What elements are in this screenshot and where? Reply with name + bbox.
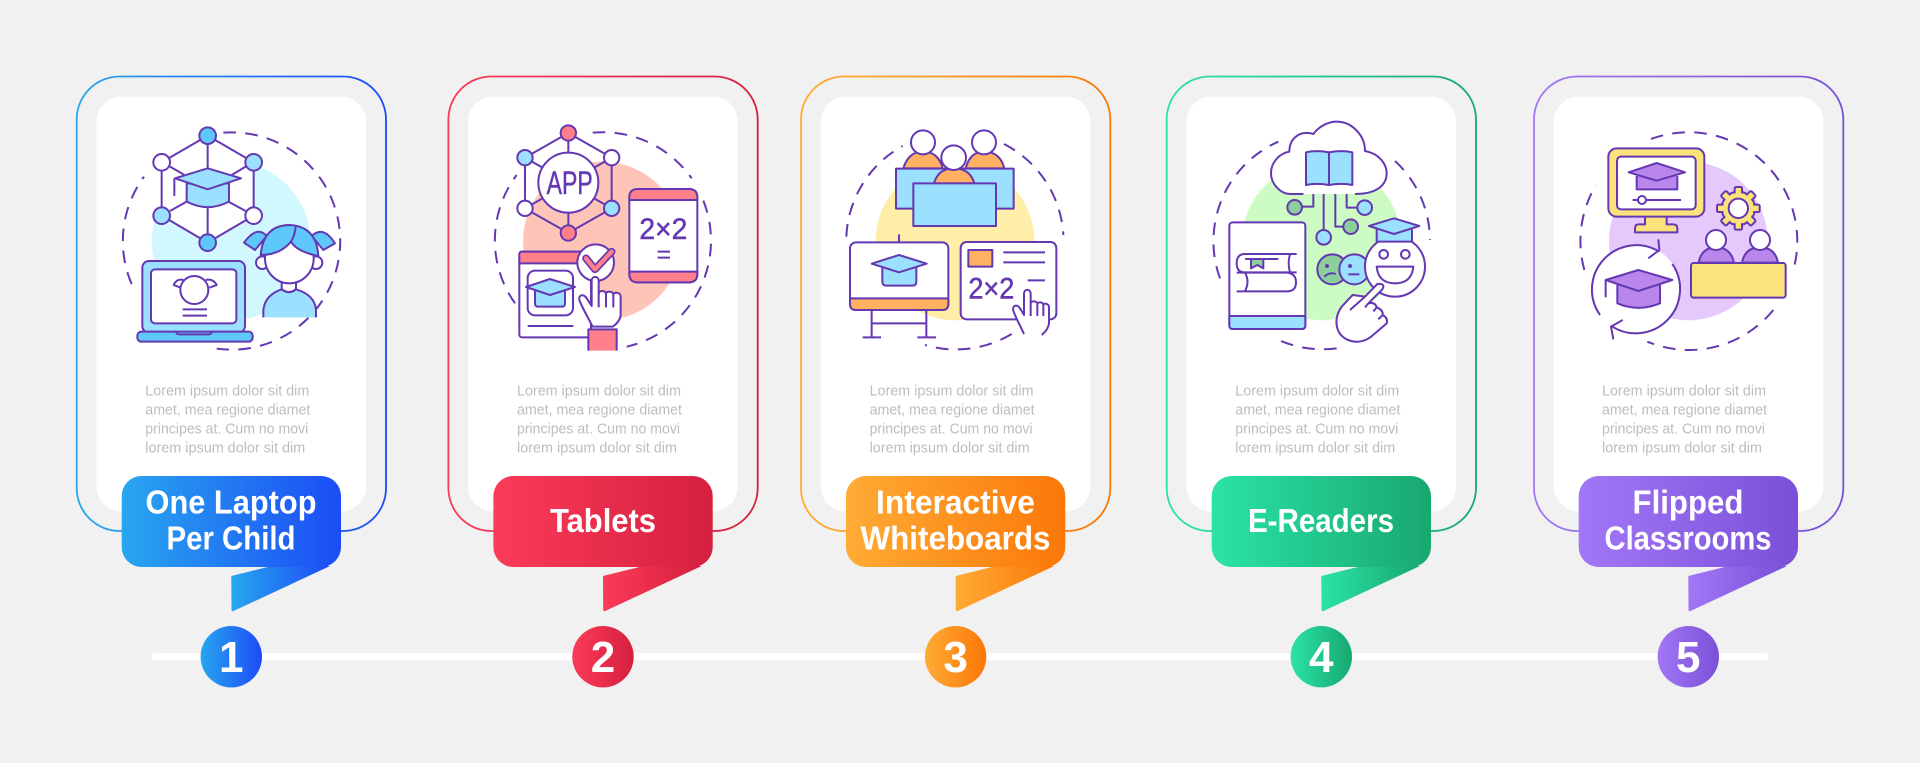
- step number 4: [1291, 626, 1352, 687]
- step number 2: [572, 626, 634, 687]
- body text: principes at. Cum no movi: [1602, 422, 1765, 438]
- icon: cloud library, e-reader and smile ratings: [1213, 122, 1430, 349]
- body text: Lorem ipsum dolor sit dim: [145, 384, 309, 400]
- panel: One Laptop Per Child: [77, 76, 386, 687]
- body text: amet, mea regione diamet: [517, 402, 682, 418]
- body text: amet, mea regione diamet: [870, 402, 1035, 418]
- icon: students, whiteboard and card: 2×2: [968, 272, 1014, 305]
- white card: [468, 96, 738, 512]
- body text: amet, mea regione diamet: [145, 402, 310, 418]
- body text: [517, 384, 682, 456]
- body text: lorem ipsum dolor sit dim: [145, 440, 305, 456]
- panel frame: [801, 76, 1110, 531]
- icon: students, whiteboard and card: [846, 130, 1063, 349]
- body text: principes at. Cum no movi: [517, 422, 680, 438]
- body text: amet, mea regione diamet: [1235, 402, 1400, 418]
- body text: lorem ipsum dolor sit dim: [1602, 440, 1762, 456]
- title tag with tail: [1212, 476, 1431, 611]
- step number 1: [201, 626, 262, 687]
- title tag with tail: Classrooms: [1604, 519, 1772, 556]
- white card: [821, 96, 1090, 512]
- body text: Lorem ipsum dolor sit dim: [1602, 384, 1766, 400]
- body text: [1602, 384, 1767, 456]
- step number 4: 4: [1309, 633, 1334, 682]
- panel: Interactive Whiteboards: [801, 76, 1110, 687]
- title tag with tail: Tablets: [550, 502, 656, 539]
- title tag with tail: E-Readers: [1248, 502, 1394, 539]
- white card: [96, 96, 366, 512]
- panel frame: [1534, 76, 1843, 531]
- body text: principes at. Cum no movi: [1235, 422, 1398, 438]
- step number 5: [1658, 626, 1719, 687]
- panel frame: [77, 76, 386, 531]
- step number 5: 5: [1676, 633, 1701, 682]
- body text: lorem ipsum dolor sit dim: [870, 440, 1030, 456]
- title tag with tail: Flipped: [1632, 483, 1744, 520]
- body text: amet, mea regione diamet: [1602, 402, 1767, 418]
- timeline line: [152, 653, 1768, 660]
- step number 2: 2: [591, 633, 615, 682]
- icon: laptop, network and girl: [123, 127, 340, 350]
- white card: [1554, 96, 1823, 512]
- title tag with tail: [493, 476, 713, 611]
- body text: principes at. Cum no movi: [870, 422, 1033, 438]
- body text: lorem ipsum dolor sit dim: [517, 440, 677, 456]
- icon: monitor, flipping cap and students: [1580, 132, 1797, 350]
- icon: app network, tablet and hand: APP: [547, 165, 593, 201]
- step number 3: [925, 626, 986, 687]
- body text: [1235, 384, 1400, 456]
- body text: principes at. Cum no movi: [145, 422, 308, 438]
- icon: app network, tablet and hand: [495, 125, 711, 351]
- body text: Lorem ipsum dolor sit dim: [1235, 384, 1399, 400]
- title tag with tail: [122, 476, 341, 611]
- panel frame: [448, 76, 758, 531]
- panel: E-Readers: [1167, 76, 1476, 687]
- panel frame: [1167, 76, 1476, 531]
- body text: Lorem ipsum dolor sit dim: [517, 384, 681, 400]
- title tag with tail: Per Child: [166, 519, 296, 556]
- title tag with tail: [846, 476, 1065, 611]
- body text: [145, 384, 310, 456]
- step number 3: 3: [943, 633, 968, 682]
- body text: Lorem ipsum dolor sit dim: [870, 384, 1034, 400]
- step number 1: 1: [219, 633, 244, 682]
- panel: Flipped Classrooms: [1534, 76, 1843, 687]
- panel: Tablets: [448, 76, 758, 687]
- body text: [870, 384, 1035, 456]
- body text: lorem ipsum dolor sit dim: [1235, 440, 1395, 456]
- icon: app network, tablet and hand: 2×2: [639, 213, 687, 246]
- title tag with tail: Whiteboards: [860, 519, 1050, 556]
- title tag with tail: One Laptop: [146, 483, 316, 520]
- white card: [1186, 96, 1456, 512]
- title tag with tail: [1579, 476, 1798, 611]
- title tag with tail: Interactive: [876, 483, 1035, 520]
